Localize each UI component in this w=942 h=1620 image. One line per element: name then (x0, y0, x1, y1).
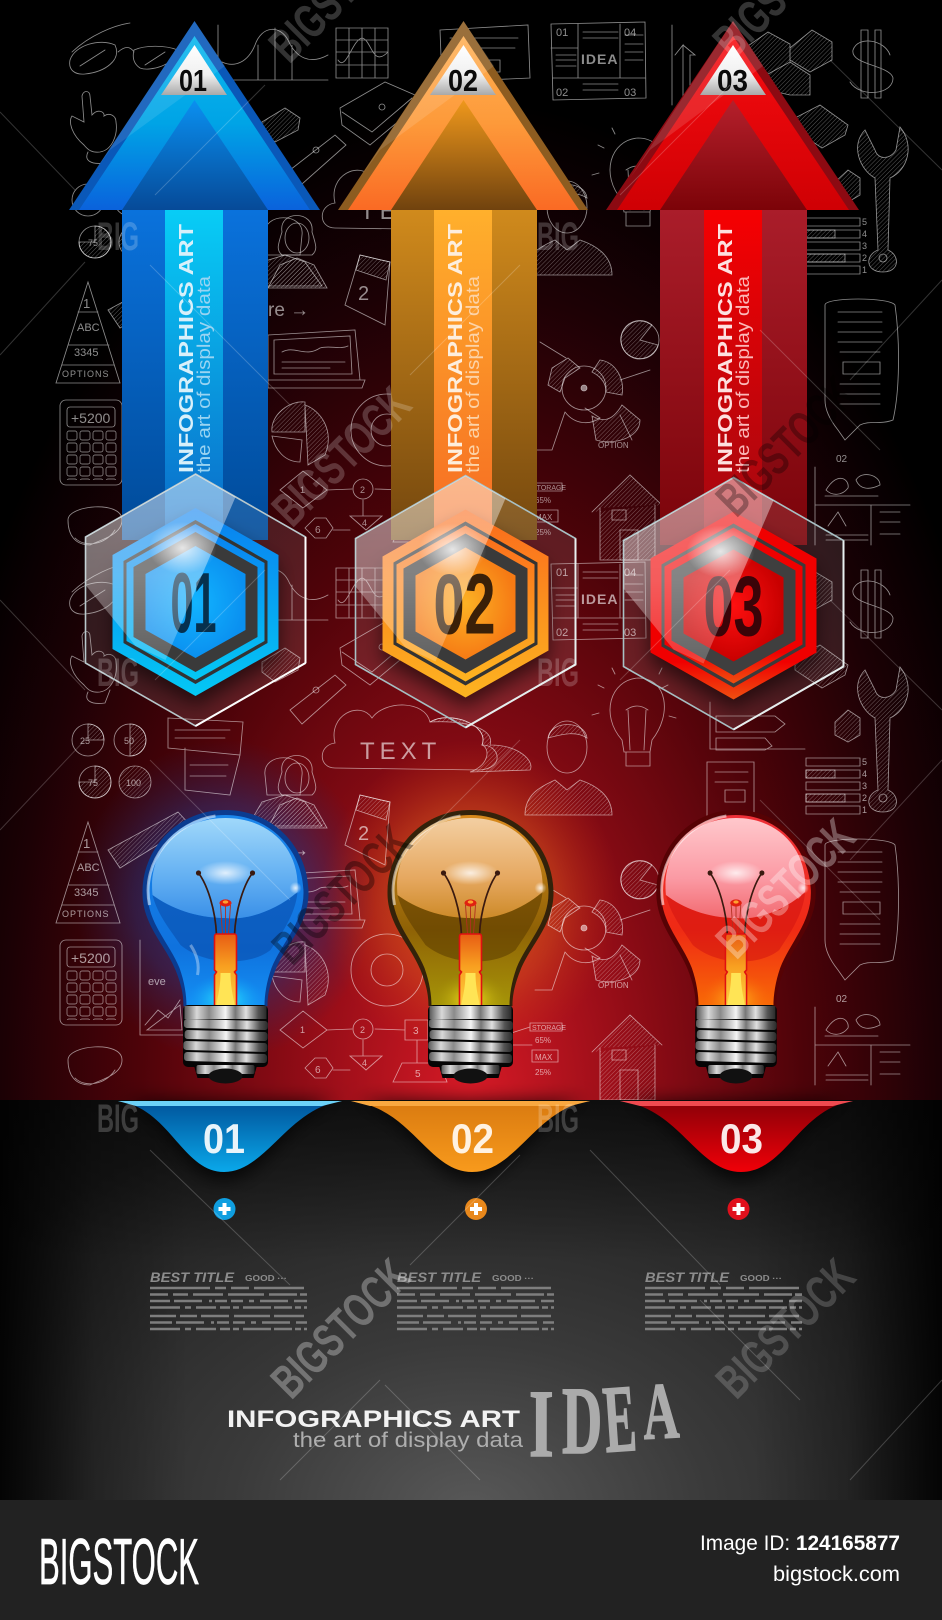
doodle sketches: upper tile: 25% (535, 528, 551, 537)
doodle sketches: upper tile: OPTION (598, 441, 629, 450)
doodle sketches: lower tile: STORAGE (532, 1025, 566, 1032)
doodle sketches: lower tile: 2 (862, 793, 867, 803)
watermark BIGSTOCK marks: BIGSTOCK (706, 1249, 866, 1409)
doodle sketches: upper tile: 2 (358, 283, 369, 305)
doodle sketches: upper tile: 01 (556, 27, 568, 39)
doodle sketches: upper tile: IDEA (581, 51, 618, 67)
doodle sketches: lower tile: 75 (88, 778, 98, 788)
arrow title text: INFOGRAPHICS ART (715, 224, 737, 473)
text block 01: BEST TITLE (150, 1269, 235, 1285)
doodle sketches: lower tile: 4 (862, 769, 867, 779)
tab 03 (620, 1101, 853, 1180)
arrow title text: INFOGRAPHICS ART (445, 224, 467, 473)
doodle sketches: lower tile: ABC (77, 862, 100, 874)
watermark BIG marks: BIG (97, 1097, 139, 1141)
arrow number 03: 03 (717, 63, 748, 98)
text block 03: BEST TITLE (645, 1269, 730, 1285)
watermark BIGSTOCK marks: BIGSTOCK (706, 367, 866, 527)
bottom title: INFOGRAPHICS ART (227, 1406, 520, 1433)
watermark BIG marks: BIG (97, 651, 139, 695)
doodle sketches: lower tile: 03 (624, 627, 636, 639)
doodle sketches: lower tile: 25% (535, 1068, 551, 1077)
doodle sketches: lower tile: eve (148, 976, 166, 988)
doodle sketches: lower tile: 1 (300, 1025, 305, 1035)
doodle sketches: upper tile: 50 (124, 196, 134, 206)
footer url: bigstock.com (773, 1563, 900, 1586)
watermark BIG marks: BIG (537, 1097, 579, 1141)
arrow number 02: 02 (448, 63, 478, 98)
tab 02 (351, 1101, 590, 1180)
doodle sketches: lower tile: OPTION (598, 981, 629, 990)
doodle sketches: upper tile: 3 (413, 486, 419, 497)
doodle sketches: lower tile: 2 (360, 1025, 365, 1035)
footer image id: Image ID: 124165877 (700, 1532, 900, 1555)
doodle sketches: lower tile: TEXT (360, 738, 441, 765)
doodle sketches: lower tile: 02 (836, 994, 848, 1005)
text block 02 (397, 1269, 554, 1329)
arrow subtitle text: the art of display data (733, 275, 753, 473)
doodle sketches: upper tile: 04 (624, 27, 636, 39)
sketch word IDEA: A (640, 1365, 681, 1457)
sketch word IDEA: D (562, 1367, 602, 1474)
doodle sketches: lower tile: +5200 (71, 950, 111, 966)
arrow number 01: 01 (179, 63, 207, 98)
arrow 02 (orange) (338, 21, 588, 540)
doodle sketches: lower tile (56, 562, 910, 1100)
doodle sketches: lower tile: 65% (535, 1036, 551, 1045)
glow behind orange bulb (320, 740, 620, 1060)
doodle sketches: upper tile: 100 (126, 238, 141, 248)
doodle sketches: upper tile: 02 (556, 87, 568, 99)
background: dark-to-red gradient (0, 0, 942, 1110)
doodle sketches: upper tile: 4 (362, 518, 367, 528)
doodle sketches: upper tile: re → (268, 300, 309, 321)
doodle sketches: upper tile: +5200 (71, 410, 111, 426)
hexagon badge 01 (86, 474, 306, 726)
text block 02: BEST TITLE (397, 1269, 482, 1285)
arrow subtitle text: the art of display data (194, 275, 214, 473)
tab number 01: 01 (203, 1115, 245, 1162)
arrow subtitle text: the art of display data (463, 275, 483, 473)
doodle sketches: lower tile: 1 (862, 805, 867, 815)
doodle sketches: upper tile: 1 (862, 265, 867, 275)
doodle sketches: lower tile: OPTIONS (62, 909, 110, 919)
doodle sketches: lower tile: 6 (315, 1065, 321, 1076)
doodle sketches: lower tile: 4 (362, 1058, 367, 1068)
bottom subtitle: the art of display data (293, 1429, 523, 1452)
doodle sketches: upper tile: 5 (862, 217, 867, 227)
sketch word IDEA: I (529, 1371, 554, 1477)
watermark BIGSTOCK marks: BIGSTOCK (262, 815, 422, 975)
doodle sketches: upper tile (56, 22, 910, 560)
doodle sketches: lower tile: 2 (358, 823, 369, 845)
doodle sketches: upper tile: 2 (862, 253, 867, 263)
watermark BIG marks: BIG (537, 651, 579, 695)
tab 01 (118, 1101, 342, 1180)
light bulb 03 (red) (656, 810, 816, 1084)
tab number 02: 02 (451, 1115, 494, 1162)
watermark BIGSTOCK marks: BIGSTOCK (262, 377, 422, 537)
hexagon badge 01: 01 (170, 556, 216, 651)
doodle sketches: lower tile: 5 (862, 757, 867, 767)
doodle sketches: upper tile: TEXT (360, 198, 441, 225)
doodle sketches: upper tile: 25 (80, 196, 90, 206)
text block 01 (150, 1269, 307, 1329)
doodle sketches: lower tile: 04 (624, 567, 636, 579)
plus icon orange (465, 1198, 487, 1220)
plus icon blue (214, 1198, 236, 1220)
doodle sketches: lower tile: 3 (862, 781, 867, 791)
watermark BIG marks (97, 215, 579, 1141)
plus icon red (728, 1198, 750, 1220)
doodle sketches: lower tile: 100 (126, 778, 141, 788)
doodle sketches: lower tile: 3 (413, 1026, 419, 1037)
doodle sketches: lower tile: IDEA (581, 591, 618, 607)
doodle sketches: upper tile: 1 (300, 485, 305, 495)
doodle sketches: lower tile: 01 (556, 567, 568, 579)
doodle sketches: lower tile: 3345 (74, 887, 98, 899)
sketch word IDEA: E (600, 1365, 639, 1473)
doodle sketches: lower tile: 5 (415, 1069, 421, 1080)
watermark BIG marks: BIG (97, 215, 139, 259)
doodle sketches: upper tile: ABC (77, 322, 100, 334)
doodle sketches: upper tile: 02 (836, 454, 848, 465)
text block 02: GOOD ··· (492, 1274, 534, 1283)
doodle sketches: lower tile: re → (268, 840, 309, 861)
doodle sketches: upper tile: 5 (415, 529, 421, 540)
doodle sketches: upper tile: 75 (88, 238, 98, 248)
doodle sketches: upper tile: OPTIONS (62, 369, 110, 379)
dark lower panel (0, 1100, 942, 1500)
footer bar (0, 1500, 942, 1620)
doodle sketches: upper tile: eve (148, 436, 166, 448)
glow behind blue bulb (75, 740, 375, 1060)
doodle sketches: upper tile: STORAGE (532, 485, 566, 492)
doodle sketches: lower tile: MAX (535, 1053, 553, 1062)
hexagon badge 03 (624, 478, 844, 730)
doodle sketches: upper tile: 4 (862, 229, 867, 239)
footer bar: BIGSTOCK (39, 1525, 199, 1598)
text block 03 (645, 1269, 802, 1329)
doodle sketches: upper tile: 3 (862, 241, 867, 251)
arrow 01 (blue) (69, 21, 320, 540)
doodle sketches: lower tile: 02 (556, 627, 568, 639)
light bulb 02 (orange) (388, 810, 554, 1084)
arrow 03 (red) (606, 21, 859, 545)
doodle sketches: upper tile: 1 (83, 296, 90, 311)
hexagon badge 02 (356, 476, 576, 728)
watermark BIGSTOCK marks: BIGSTOCK (706, 809, 866, 969)
doodle sketches: upper tile: 3345 (74, 347, 98, 359)
arrow title text: INFOGRAPHICS ART (176, 224, 198, 473)
doodle sketches: lower tile: 25 (80, 736, 90, 746)
tab number 03: 03 (720, 1115, 763, 1162)
watermark BIG marks: BIG (537, 215, 579, 259)
text block 01: GOOD ··· (245, 1274, 287, 1283)
doodle sketches: lower tile: 1 (83, 836, 90, 851)
doodle sketches: upper tile: MAX (535, 513, 553, 522)
text block 03: GOOD ··· (740, 1274, 782, 1283)
doodle sketches: upper tile: 2 (360, 485, 365, 495)
doodle sketches: upper tile: 03 (624, 87, 636, 99)
light bulb 01 (blue) (142, 810, 308, 1084)
badge number 03: 03 (704, 560, 763, 654)
doodle sketches: lower tile: 50 (124, 736, 134, 746)
watermark BIGSTOCK marks (259, 0, 866, 1409)
doodle sketches: upper tile: 65% (535, 496, 551, 505)
doodle sketches: upper tile: 6 (315, 525, 321, 536)
badge number 02: 02 (434, 558, 496, 652)
watermark BIGSTOCK marks: BIGSTOCK (261, 1249, 421, 1409)
sketch word IDEA (529, 1365, 681, 1477)
